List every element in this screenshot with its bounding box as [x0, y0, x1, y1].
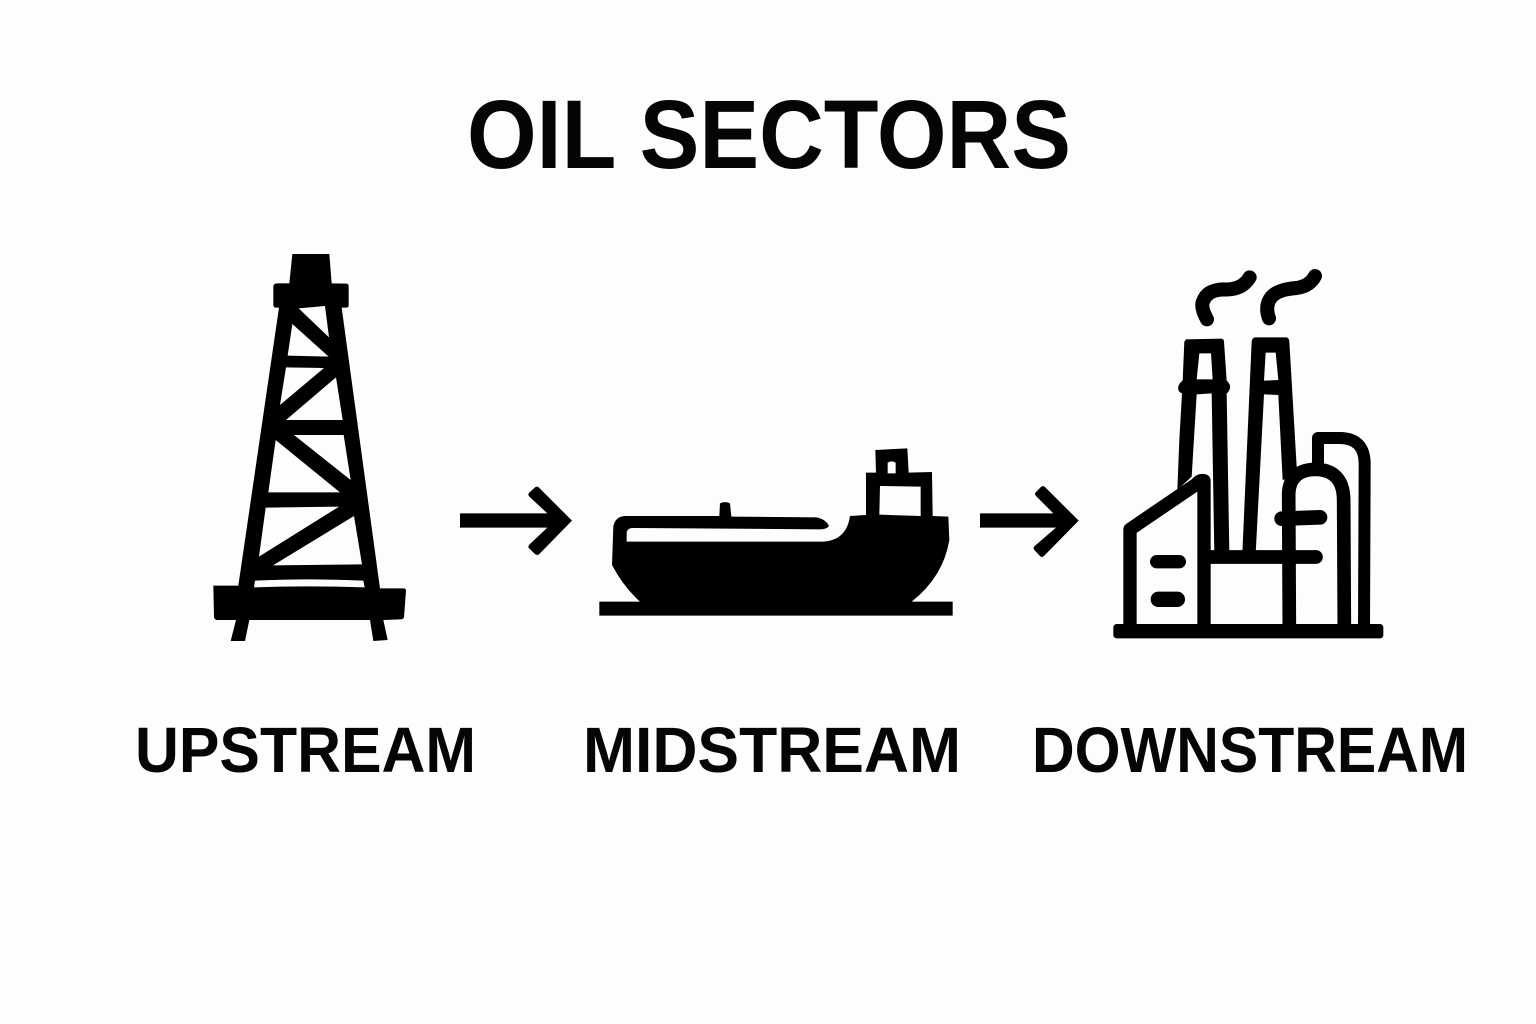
ground line: [1113, 624, 1383, 638]
smoke plumes: [1202, 276, 1315, 319]
label: midstream: MIDSTREAM: [583, 714, 961, 786]
title: OIL SECTORS: [467, 80, 1071, 189]
icon: oil derrick: [213, 254, 406, 641]
tank pipe: [1318, 438, 1365, 630]
chimney one: [1177, 339, 1230, 553]
arrow: upstream to midstream: [460, 487, 572, 555]
label: upstream: UPSTREAM: [135, 714, 476, 786]
arrow: midstream to downstream: [980, 486, 1079, 557]
building windows: [1157, 562, 1179, 599]
icon: oil tanker ship: [599, 448, 953, 616]
icon: refinery factory: [1113, 276, 1383, 638]
storage tank: [1289, 469, 1344, 630]
left building: [1130, 481, 1204, 630]
crossbar: [1282, 517, 1320, 519]
connecting base: [1207, 536, 1316, 577]
label: downstream: DOWNSTREAM: [1032, 714, 1468, 786]
chimney two: [1242, 337, 1297, 553]
